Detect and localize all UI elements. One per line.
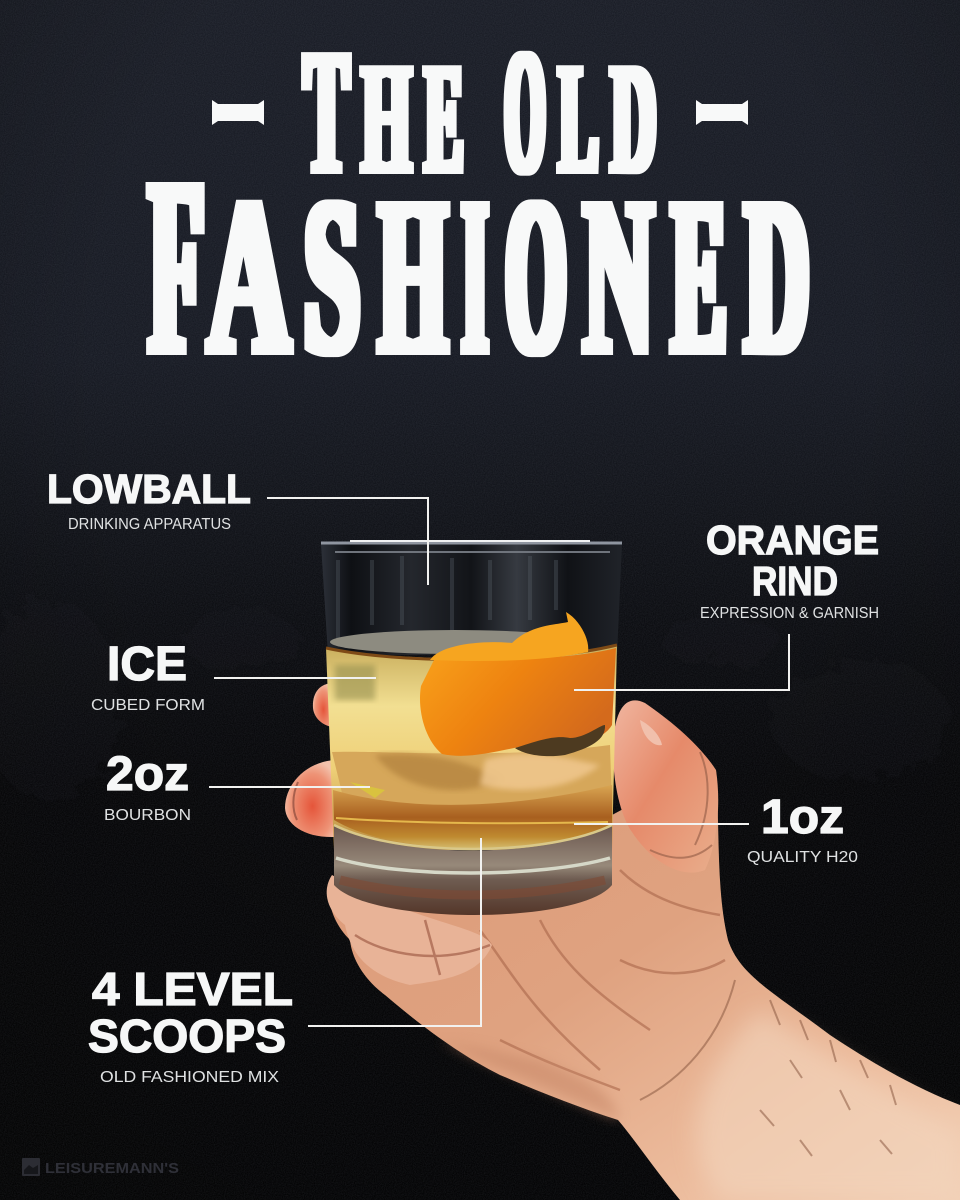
glass rim <box>321 541 622 552</box>
liquid meniscus <box>326 645 617 660</box>
ice texture <box>335 665 375 700</box>
title line: Fashioned: N <box>584 153 653 400</box>
callout: bourbon <box>104 748 370 824</box>
rind dark edge <box>515 725 605 756</box>
text: D <box>745 153 809 400</box>
callout: old fashioned mix: SCOOPS <box>88 1010 286 1062</box>
glass empty upper <box>321 544 622 655</box>
title line: Fashioned: H <box>379 153 447 400</box>
callout: orange rind: ORANGE <box>706 517 879 563</box>
back finger <box>313 683 332 727</box>
title line: Fashioned: F <box>149 126 204 406</box>
title line: The Old: E <box>425 31 463 205</box>
lowball glass with drink <box>321 541 622 915</box>
dash right <box>696 100 748 125</box>
hand holding the glass <box>285 683 960 1200</box>
callout: orange rind: EXPRESSION & GARNISH <box>700 605 879 622</box>
palm and arm <box>329 770 960 1200</box>
icon: logo glass <box>22 1158 40 1176</box>
orange rind <box>420 648 616 756</box>
title line: Fashioned: O <box>506 153 566 400</box>
palm shadow <box>440 1040 620 1120</box>
title line: The Old: H <box>362 31 411 205</box>
callout: old fashioned mix: OLD FASHIONED MIX <box>100 1069 280 1086</box>
glass base <box>334 825 612 915</box>
index fingertip <box>285 760 335 837</box>
title <box>149 14 809 406</box>
whiskey body <box>326 645 617 850</box>
thumb <box>613 700 718 873</box>
title line: Fashioned: A <box>208 153 290 400</box>
title line: Fashioned <box>149 126 809 406</box>
callout: ice: CUBED FORM <box>91 697 205 714</box>
orange rind top <box>430 612 588 661</box>
callout: water <box>574 791 858 866</box>
callout: ice: ICE <box>107 638 187 691</box>
logo: Leisuremann's: LEISUREMANN'S <box>45 1161 179 1177</box>
callout: old fashioned mix <box>88 838 481 1086</box>
title line: The Old: O <box>505 14 545 210</box>
callout: lowball <box>47 466 428 585</box>
dash left <box>212 100 264 125</box>
title line: The Old <box>212 14 748 210</box>
ice surface <box>330 630 580 654</box>
title line: The Old: D <box>611 31 656 205</box>
callout: lowball: LOWBALL <box>47 466 251 512</box>
logo: Leisuremann's <box>22 1158 179 1177</box>
arm highlight and hair <box>697 1010 960 1200</box>
callout: water: 1oz <box>761 791 844 844</box>
callout: bourbon: BOURBON <box>104 807 191 824</box>
glass streaks <box>338 556 556 640</box>
callout: ice <box>91 638 376 714</box>
callout: bourbon: 2oz <box>106 748 189 801</box>
callout: orange rind <box>574 517 879 690</box>
bottom whiskey <box>333 785 612 850</box>
callout: orange rind: RIND <box>752 558 838 604</box>
title line: The Old: T <box>304 14 349 210</box>
title line: Fashioned: E <box>672 153 726 400</box>
title line: Fashioned: S <box>304 153 360 400</box>
callout: old fashioned mix: 4 LEVEL <box>92 963 293 1015</box>
callout: water: QUALITY H20 <box>747 849 858 866</box>
title line: Fashioned: I <box>463 153 487 400</box>
lower ice <box>332 745 612 819</box>
callout: lowball: DRINKING APPARATUS <box>68 516 231 533</box>
title line: The Old: L <box>559 31 598 205</box>
palm creases <box>480 870 725 1090</box>
lower fingers <box>327 875 492 985</box>
